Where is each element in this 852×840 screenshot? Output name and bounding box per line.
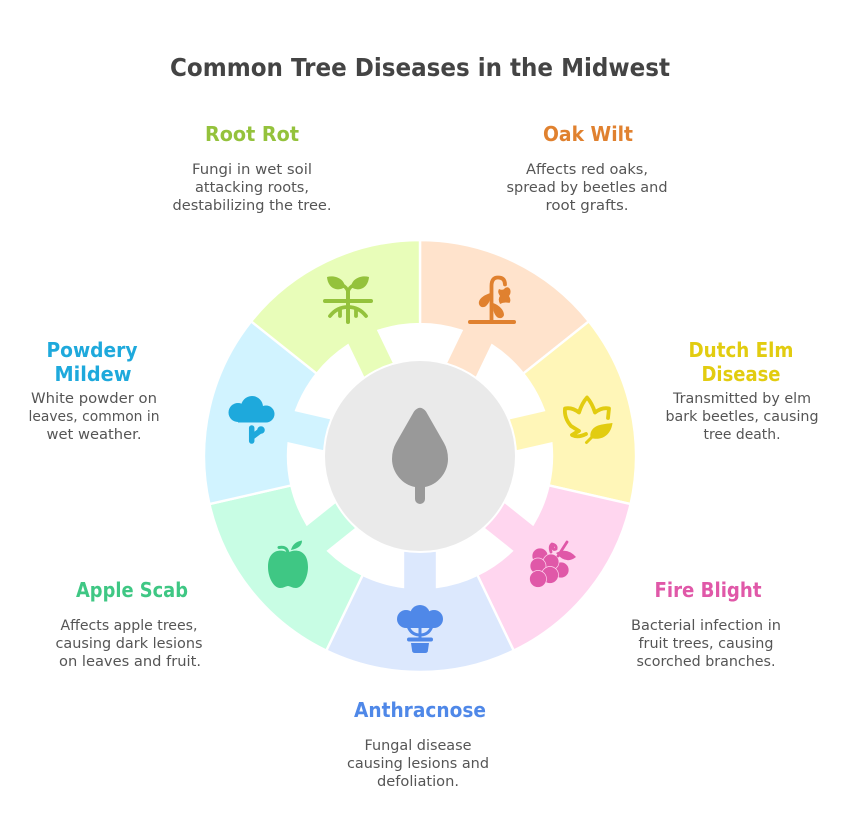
text block: powdery mildew: wet weather.: [46, 427, 142, 443]
panel: fire blight: [631, 578, 781, 670]
text block: oak wilt: root grafts.: [546, 198, 628, 214]
icon: berries: [530, 542, 576, 588]
heading: dutch elm disease: Dutch Elm: [688, 338, 794, 362]
panel: oak wilt: [506, 122, 668, 214]
text block: powdery mildew: leaves, common in: [28, 409, 160, 425]
text block: root rot: attacking roots,: [195, 180, 309, 196]
text block: root rot: [172, 162, 332, 214]
segment: oak wilt: [377, 221, 598, 412]
segment: apple scab: [193, 442, 405, 664]
icon: sprout with roots: [325, 276, 371, 322]
panel: dutch elm disease: [666, 338, 818, 443]
text block: anthracnose: Fungal disease: [364, 738, 472, 754]
text block: anthracnose: defoliation.: [377, 774, 459, 790]
icon: wilting plant: [468, 278, 516, 324]
icon: cloud tree: [228, 396, 274, 441]
text block: powdery mildew: [28, 391, 160, 443]
text block: fire blight: [631, 618, 781, 670]
text block: dutch elm disease: bark beetles, causing: [666, 409, 818, 425]
text block: anthracnose: [347, 738, 489, 790]
heading: anthracnose: Anthracnose: [354, 698, 486, 722]
heading: powdery mildew: Mildew: [54, 362, 132, 386]
panel: anthracnose: [347, 698, 489, 790]
panel: powdery mildew: [28, 338, 160, 443]
text block: anthracnose: causing lesions and: [347, 756, 489, 772]
segment: root rot: [242, 221, 463, 412]
segment: fire blight: [435, 442, 647, 664]
heading: apple scab: Apple Scab: [76, 578, 188, 602]
segment: anthracnose: [326, 550, 514, 672]
title: Common Tree Diseases in the Midwest: [170, 53, 670, 82]
text block: oak wilt: Affects red oaks,: [526, 162, 648, 178]
heading: powdery mildew: Powdery: [46, 338, 138, 362]
icon: apple: [268, 540, 308, 588]
text block: dutch elm disease: tree death.: [704, 427, 780, 443]
heading: oak wilt: Oak Wilt: [543, 122, 633, 146]
wheel diagram: [189, 221, 651, 672]
text block: oak wilt: spread by beetles and: [506, 180, 668, 196]
segment: dutch elm disease: [491, 317, 651, 526]
text block: oak wilt: [506, 162, 668, 214]
heading: powdery mildew: [46, 338, 138, 386]
text block: apple scab: causing dark lesions: [56, 636, 202, 652]
icon: center leaf: [392, 408, 448, 504]
heading: root rot: Root Rot: [205, 122, 299, 146]
text block: powdery mildew: White powder on: [31, 391, 157, 407]
icon: potted tree: [397, 605, 443, 653]
text block: root rot: Fungi in wet soil: [192, 162, 312, 178]
panel: apple scab: [56, 578, 202, 670]
text block: dutch elm disease: [666, 391, 818, 443]
text block: apple scab: Affects apple trees,: [60, 618, 198, 634]
icon: maple leaf: [565, 398, 612, 442]
text block: fire blight: scorched branches.: [636, 654, 776, 670]
heading: fire blight: Fire Blight: [654, 578, 762, 602]
text block: fire blight: fruit trees, causing: [638, 636, 774, 652]
panel: root rot: [172, 122, 332, 214]
heading: dutch elm disease: [688, 338, 794, 386]
text block: root rot: destabilizing the tree.: [172, 198, 332, 214]
heading: dutch elm disease: Disease: [702, 362, 780, 386]
text block: fire blight: Bacterial infection in: [631, 618, 781, 634]
text block: dutch elm disease: Transmitted by elm: [672, 391, 811, 407]
center circle: [324, 360, 516, 552]
segment: powdery mildew: [189, 317, 349, 526]
text block: apple scab: on leaves and fruit.: [59, 654, 201, 670]
text block: apple scab: [56, 618, 202, 670]
